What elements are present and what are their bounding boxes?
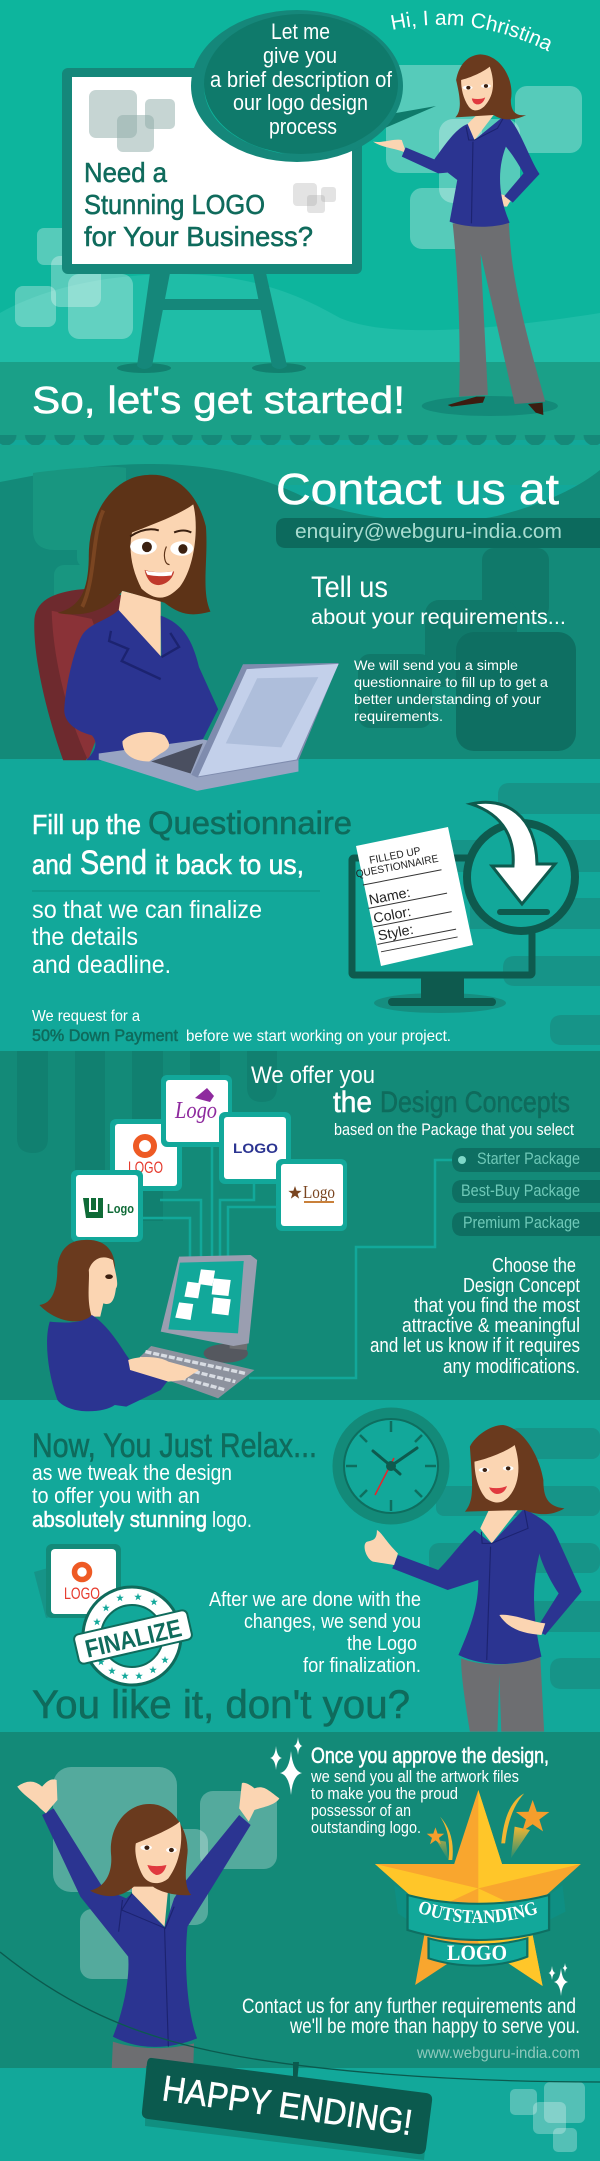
- heading: fill up: Fill up the: [32, 809, 141, 840]
- logo card: brown: Logo: [303, 1182, 335, 1202]
- character: woman at laptop: [34, 475, 339, 791]
- text: after changes: the Logo: [347, 1633, 417, 1655]
- character: Christina thumbs up: [365, 1425, 582, 1732]
- icon: filled up questionnaire: [353, 827, 473, 966]
- character: woman at desktop computer: [39, 1240, 257, 1411]
- text: once you approve: [310, 1743, 549, 1837]
- text: tweak design: absolutely stunning: [32, 1507, 207, 1532]
- logo card: blue: LOGO: [233, 1140, 278, 1156]
- package list: Starter Package: [477, 1149, 580, 1168]
- text: once you approve: possessor of an: [311, 1802, 411, 1820]
- text: choose the design concept: Choose the: [492, 1255, 576, 1277]
- text: questionnaire note: requirements.: [354, 708, 443, 724]
- package list: [452, 1148, 600, 1236]
- text: down payment: [32, 1008, 451, 1045]
- easel: [62, 68, 362, 373]
- panel: contact us: [0, 445, 600, 760]
- icon: clock: [338, 1413, 444, 1519]
- decorative squares: [33, 467, 576, 751]
- text: questionnaire note: questionnaire to fill up to get a: [354, 674, 548, 690]
- icon: filled up questionnaire: QUESTIONNAIRE: [355, 853, 439, 881]
- heading: contact us at: Contact us at: [276, 465, 559, 514]
- panel: happy ending: [0, 1952, 600, 2161]
- text: tweak design: as we tweak the design: [32, 1460, 232, 1485]
- text: down payment: We request for a: [32, 1008, 140, 1025]
- logo card: to finalize: LOGO: [64, 1584, 100, 1603]
- character: Christina arms raised: [17, 1779, 279, 2068]
- icon: filled up questionnaire: Color:: [372, 903, 412, 926]
- text: questionnaire note: We will send you a simple: [354, 657, 518, 673]
- speech bubble: process: [269, 114, 337, 139]
- panel: questionnaire: [0, 759, 600, 1051]
- easel headline: Need a: [84, 157, 167, 188]
- text: choose the design concept: attractive & meaningful: [402, 1315, 580, 1337]
- text: tell us: about your requirements...: [311, 606, 566, 629]
- package list: Premium Package: [463, 1213, 580, 1232]
- text: choose the design concept: any modifications.: [443, 1356, 580, 1378]
- text: tell us: Tell us: [311, 571, 388, 604]
- panel: design concepts: [0, 1051, 600, 1400]
- heading: let's get started: So, let's get started!: [32, 380, 405, 422]
- text: after changes: After we are done with the: [209, 1589, 421, 1611]
- text: we offer design concepts: the: [333, 1086, 372, 1119]
- text: once you approve: we send you all the artwork files: [310, 1768, 519, 1786]
- badge: outstanding logo star: [375, 1790, 581, 1986]
- text: after changes: changes, we send you: [244, 1611, 421, 1633]
- curved greeting: Hi, I am Christina: [391, 10, 551, 52]
- text: after changes: [209, 1589, 421, 1677]
- easel headline: Stunning LOGO: [84, 189, 265, 220]
- speech bubble: give you: [263, 43, 337, 68]
- speech bubble: our logo design: [233, 90, 368, 115]
- text: finalize details: the details: [32, 923, 138, 951]
- icon: filled up questionnaire: Name:: [367, 884, 412, 908]
- logo card: green: [71, 1170, 143, 1242]
- icon: monitor with download arrow: [352, 802, 575, 1013]
- text: after changes: for finalization.: [303, 1655, 421, 1677]
- email bar: enquiry@webguru-india.com: [295, 521, 562, 543]
- heading: fill up: Questionnaire: [148, 805, 352, 841]
- text: finalize details: so that we can finalize: [32, 896, 262, 924]
- sign: happy ending: HAPPY ENDING!: [160, 2067, 415, 2143]
- decorative squares: [15, 65, 582, 339]
- speech bubble: Let me: [271, 19, 330, 44]
- heading: fill up: Send: [80, 844, 147, 882]
- sparkles: [270, 1737, 568, 1996]
- text: tweak design: logo.: [212, 1507, 252, 1532]
- text: down payment: before we start working on your project.: [186, 1028, 451, 1045]
- text: questionnaire note: better understanding of your: [354, 691, 541, 707]
- badge: outstanding logo star: LOGO: [447, 1940, 507, 1965]
- text: tweak design: to offer you with an: [32, 1483, 200, 1508]
- logo card: red: [110, 1119, 182, 1191]
- text: tweak design: [32, 1460, 252, 1532]
- easel headline: for Your Business?: [84, 221, 313, 252]
- logo card: purple: [161, 1075, 232, 1147]
- character: Christina standing: [373, 54, 558, 416]
- logo card: red: LOGO: [128, 1158, 163, 1177]
- text: once you approve: Once you approve the design,: [311, 1743, 549, 1768]
- icon: filled up questionnaire: Style:: [376, 921, 415, 943]
- text: tell us: [311, 571, 566, 629]
- heading: just relax: Now, You Just Relax...: [32, 1427, 317, 1465]
- stamp: finalize: [73, 1587, 193, 1685]
- badge: outstanding logo star: OUTSTANDING: [419, 1902, 537, 1924]
- email bar: [276, 518, 600, 548]
- text: questionnaire note: [354, 657, 548, 724]
- panel: approve: [0, 1732, 600, 2068]
- text: choose the design concept: [370, 1255, 580, 1378]
- heading: fill up: [32, 805, 352, 882]
- decorative squares: [53, 1767, 277, 1979]
- logo card: purple: Logo: [174, 1098, 217, 1124]
- text: down payment: 50% Down Payment: [32, 1026, 178, 1045]
- panel: intro with easel and Christina: [0, 0, 600, 445]
- text: choose the design concept: that you find the most: [414, 1295, 580, 1317]
- text: contact further: [242, 1995, 580, 2062]
- heading: you like it: You like it, don't you?: [32, 1683, 410, 1727]
- icon: filled up questionnaire: FILLED UP: [368, 845, 422, 867]
- text: we offer design concepts: We offer you: [251, 1062, 375, 1089]
- hanging string: [0, 1952, 600, 2082]
- heading: fill up: and: [32, 849, 72, 880]
- text: once you approve: to make you the proud: [311, 1785, 458, 1803]
- text: contact further: www.webguru-india.com: [416, 2045, 580, 2062]
- panel: relax: [0, 1400, 600, 1732]
- text: finalize details: and deadline.: [32, 951, 171, 979]
- heading: fill up: it back to us,: [155, 849, 304, 880]
- logo card: to finalize: [34, 1544, 121, 1618]
- speech bubble: a brief description of: [210, 67, 393, 92]
- easel headline: [84, 157, 313, 252]
- connector wires: [142, 1147, 462, 1378]
- package list: Best-Buy Package: [461, 1181, 580, 1200]
- decorative squares: [510, 2082, 585, 2152]
- logo card: brown: [276, 1159, 347, 1231]
- text: finalize details: [32, 896, 262, 979]
- stamp: finalize: FINALIZE: [83, 1614, 184, 1664]
- text: once you approve: outstanding logo.: [311, 1819, 421, 1837]
- logo card: green: Logo: [107, 1201, 134, 1216]
- decorative bars: [429, 1428, 600, 1689]
- decorative bars: [17, 1051, 277, 1241]
- speech bubble: [191, 10, 436, 162]
- decorative bars: [450, 783, 600, 1045]
- text: we offer design concepts: [251, 1062, 574, 1139]
- logo card: blue: [219, 1112, 291, 1184]
